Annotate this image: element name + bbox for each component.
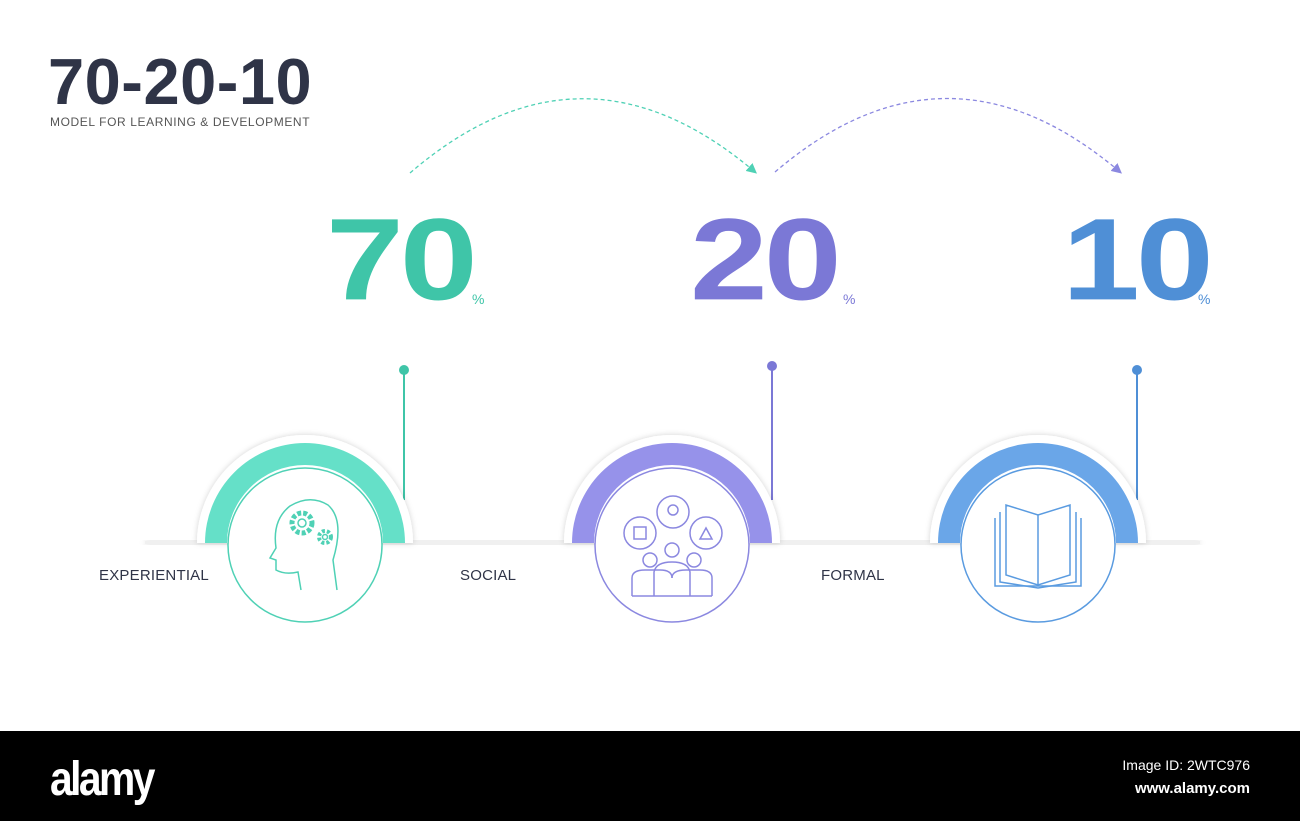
text: FORMAL bbox=[821, 567, 885, 584]
pins bbox=[399, 365, 409, 500]
number 10: % bbox=[1198, 291, 1210, 307]
title: 70-20-10 bbox=[48, 45, 312, 118]
footer bar: Image ID: 2WTC976 bbox=[1122, 757, 1250, 773]
shelf bbox=[145, 541, 1200, 544]
title: MODEL FOR LEARNING & DEVELOPMENT bbox=[50, 115, 310, 129]
icon: group discussion bbox=[624, 496, 722, 596]
number 20: 20 bbox=[690, 195, 838, 325]
footer bar bbox=[0, 731, 1300, 821]
panel: formal bbox=[930, 435, 1146, 622]
arrow: 70 to 20 bbox=[410, 99, 755, 173]
panel: experiential bbox=[197, 435, 413, 622]
number 70: 70 bbox=[326, 195, 474, 325]
arrow: 20 to 10 bbox=[775, 98, 1120, 172]
panel: social bbox=[564, 435, 780, 622]
footer bar: www.alamy.com bbox=[1134, 780, 1250, 797]
labels: EXPERIENTIAL bbox=[99, 567, 209, 584]
icon: open book bbox=[995, 505, 1081, 588]
footer bar: alamy bbox=[50, 753, 156, 806]
number 70: % bbox=[472, 291, 484, 307]
number 20: % bbox=[843, 291, 855, 307]
text: SOCIAL bbox=[460, 567, 516, 584]
icon: head with gears bbox=[270, 500, 338, 590]
number 10: 10 bbox=[1062, 195, 1210, 325]
